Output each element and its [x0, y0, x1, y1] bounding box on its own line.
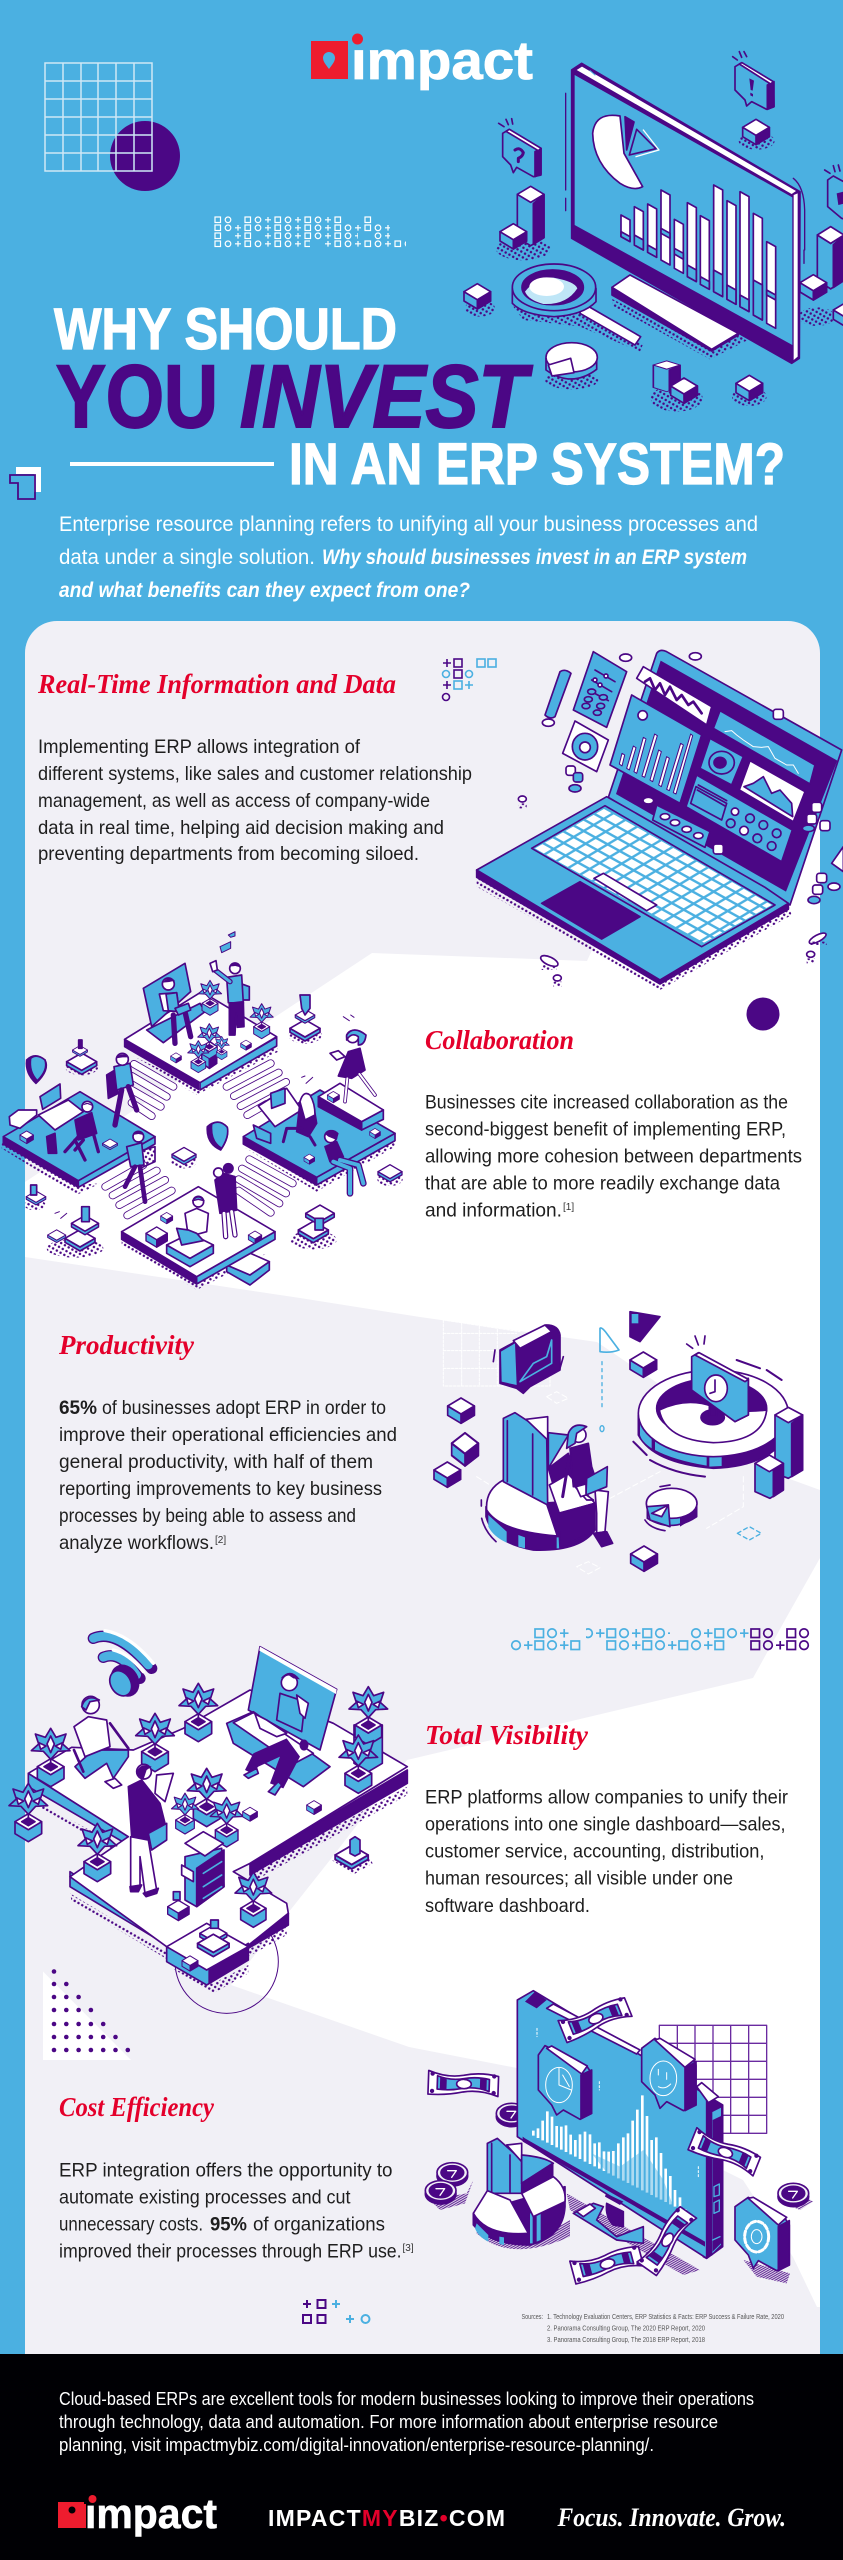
filing cabinet: [182, 1832, 224, 1907]
standing man with tablet: [128, 1764, 173, 1897]
illustration: cost efficiency monitor and money: [425, 1991, 813, 2284]
stairs: [105, 1063, 293, 1215]
footer text: planning, visit impactmybiz.com/digital-innovation/enterprise-resource-planning/.: [59, 2435, 654, 2455]
illustration: analytics monitor: [464, 52, 843, 412]
person: woman in dress: [330, 1030, 375, 1102]
body text: [59, 1397, 397, 1554]
person: VR user: [325, 1130, 363, 1193]
pins: [26, 932, 354, 1218]
body text: [38, 736, 472, 865]
body text: [1]: [563, 1202, 574, 1213]
halftone shadows: [465, 132, 835, 412]
title: why should you invest in an ERP system: INVEST: [240, 346, 533, 446]
3d pie chart: [473, 2138, 565, 2245]
intro paragraph: and what benefits can they expect from one?: [59, 579, 470, 602]
overlay tint on bars: [592, 2150, 673, 2207]
decorative glyph cluster: [442, 659, 496, 700]
body text: general productivity, with half of them: [59, 1451, 373, 1473]
side stands: [26, 995, 402, 1251]
person: walking with backpack: [107, 1053, 137, 1125]
speech bubbles: [538, 2038, 789, 2271]
tagline: Focus. Innovate. Grow.: [557, 2503, 786, 2532]
money bills: [428, 1994, 762, 2284]
body text: of organizations: [253, 2213, 385, 2235]
decorative grid with purple circle: [45, 63, 180, 191]
sources: [522, 2314, 784, 2344]
section: cost efficiency: [59, 2092, 414, 2262]
body text: preventing departments from becoming siloed.: [38, 843, 419, 865]
body text: operations into one single dashboard—sales,: [425, 1814, 786, 1836]
body text: [3]: [402, 2243, 414, 2254]
body text: [59, 2160, 414, 2262]
bottom platform: [122, 1187, 275, 1285]
body text: that are able to more readily exchange data: [425, 1172, 780, 1194]
heading: Productivity: [58, 1330, 195, 1360]
illustration: total visibility platform: [9, 1631, 407, 2013]
left platform: [3, 1092, 155, 1187]
body text: processes by being able to assess and: [59, 1505, 356, 1527]
woman with laptop: [563, 1425, 613, 1547]
halftone shadows: [40, 1787, 407, 1993]
body text: allowing more cohesion between departments: [425, 1145, 802, 1167]
body text: Implementing ERP allows integration of: [38, 736, 361, 758]
footer text: Cloud-based ERPs are excellent tools for modern businesses looking to improve their operations: [59, 2389, 754, 2409]
heading: Real-Time Information and Data: [37, 669, 396, 699]
intro paragraph: data under a single solution.: [59, 546, 315, 569]
people: standing couple: [214, 1164, 237, 1237]
body text: [425, 1092, 802, 1221]
man on bench with laptop: [227, 1647, 337, 1795]
keyboard deck: [477, 797, 788, 984]
body text: management, as well as access of company-wide: [38, 790, 430, 812]
sources: 3. Panorama Consulting Group, The 2018 ERP Report, 2018: [547, 2337, 705, 2344]
illustration: laptop dashboard: [477, 650, 843, 990]
footer band: [0, 2354, 843, 2560]
pie chart on screen: [593, 115, 659, 189]
illustration: productivity charts and woman with laptop: [434, 1312, 803, 1574]
panel: content background: [25, 621, 820, 2354]
body text: automate existing processes and cut: [59, 2186, 351, 2208]
decorative symbol rows: [510, 1628, 810, 1652]
section: collaboration: [425, 998, 802, 1221]
body text: different systems, like sales and customer relationship: [38, 763, 472, 785]
title: why should you invest in an ERP system: YOU: [56, 346, 218, 446]
body text: ERP platforms allow companies to unify their: [425, 1787, 788, 1809]
person: carrying box: [125, 1131, 155, 1202]
body text: data in real time, helping aid decision making and: [38, 817, 444, 839]
body text: [2]: [215, 1535, 226, 1546]
top platform: [125, 992, 277, 1090]
monitor stand: [573, 2203, 643, 2243]
floating shapes: [434, 1312, 761, 1571]
title: why should you invest in an ERP system: [54, 297, 785, 497]
footer logo: impact: [85, 2490, 217, 2537]
person: standing man with phone and backpack: [210, 961, 249, 1035]
small cubes: [20, 1040, 380, 1247]
person: man on bench with monitor: [143, 963, 205, 1043]
line bars on screen: [533, 2095, 685, 2212]
pie with seated woman: [481, 1413, 595, 1550]
body text: of businesses adopt ERP in order to: [102, 1397, 386, 1419]
decorative code pattern: [214, 216, 406, 248]
sources: 2. Panorama Consulting Group, The 2020 ERP Report, 2020: [547, 2326, 705, 2332]
heading: Total Visibility: [425, 1720, 589, 1750]
right platform: [243, 1083, 395, 1185]
person: sitting man: [177, 1196, 208, 1245]
platform: [28, 1690, 407, 1985]
footer text: [59, 2389, 754, 2455]
logo: impact: impact: [351, 31, 533, 91]
icon: bracket corner: [10, 467, 41, 499]
monitor stand: [612, 275, 738, 351]
body text: Businesses cite increased collaboration as the: [425, 1092, 788, 1114]
cubes and columns: [464, 119, 843, 403]
monitor: [517, 1991, 723, 2258]
centre planters: [188, 980, 273, 1073]
footer text: through technology, data and automation. For more information about enterprise resource: [59, 2412, 718, 2432]
purple grid: [659, 2025, 767, 2133]
sources: 1. Technology Evaluation Centers, ERP Statistics & Facts: ERP Success & Failure Rate, 2020: [547, 2314, 784, 2321]
website url: IMPACTMYBIZ•COM: [268, 2505, 505, 2531]
body text: and information.: [425, 1199, 562, 1221]
magnifying glass: [512, 264, 641, 345]
intro paragraph: [59, 513, 758, 602]
small pie icon: [546, 343, 597, 379]
laptop lid: [608, 650, 842, 905]
body text: analyze workflows.: [59, 1532, 214, 1554]
seated man: [74, 1696, 128, 1788]
section: productivity: [58, 1330, 397, 1554]
small items: [168, 1801, 368, 1971]
intro paragraph: Enterprise resource planning refers to unifying all your business processes and: [59, 513, 758, 536]
body text: software dashboard.: [425, 1895, 590, 1917]
desktop monitor with clock: [687, 1336, 748, 1425]
columns: [755, 1407, 803, 1498]
person: woman at workstation: [253, 1088, 317, 1145]
thin circle: [175, 1910, 278, 2013]
person: at desk: [9, 1084, 117, 1160]
body text: improve their operational efficiencies and: [59, 1424, 397, 1446]
screen widgets: [610, 667, 815, 862]
decorative glyphs bottom: [303, 2300, 370, 2323]
wifi icon: [93, 1631, 153, 1701]
body text: 65%: [59, 1397, 97, 1419]
purple dot: [746, 998, 780, 1030]
intro paragraph: Why should businesses invest in an ERP system: [322, 546, 747, 569]
body text: reporting improvements to key business: [59, 1478, 382, 1500]
speech bubble: settings: [825, 165, 843, 220]
plants: [9, 1683, 388, 1927]
section: real-time information and data: [37, 669, 472, 865]
coins: [425, 2103, 809, 2207]
hatched shadows: [430, 2180, 813, 2283]
laptop shadow: [477, 875, 792, 990]
title: why should you invest in an ERP system: WHY SHOULD: [54, 297, 397, 362]
small pie chart: [645, 1485, 697, 1531]
dotted triangle: [43, 1969, 131, 2060]
body text: improved their processes through ERP use.: [59, 2240, 402, 2262]
body text: ERP integration offers the opportunity to: [59, 2160, 393, 2182]
heading: Cost Efficiency: [59, 2092, 215, 2122]
white dashed grid: [443, 1320, 550, 1527]
big ring chart: [633, 1360, 788, 1477]
body text: second-biggest benefit of implementing ERP,: [425, 1118, 786, 1140]
heading: Collaboration: [425, 1025, 574, 1055]
halftone shadows: [2, 1026, 403, 1290]
body text: customer service, accounting, distribution,: [425, 1841, 764, 1863]
speech bubble: exclamation: [733, 52, 774, 109]
illustration: collaboration isometric platforms: [2, 932, 403, 1290]
sources: Sources:: [522, 2314, 543, 2321]
speech bubble: question: [499, 119, 541, 177]
body text: 95%: [210, 2213, 247, 2235]
speech bubble with line chart: [493, 1325, 563, 1393]
monitor body: [566, 63, 805, 363]
white dashed connectors: [477, 1392, 743, 1574]
floating controls: [518, 652, 843, 987]
bar chart on screen: [621, 185, 776, 328]
body text: [425, 1787, 788, 1917]
body text: human resources; all visible under one: [425, 1868, 733, 1890]
section: total visibility: [425, 1720, 788, 1917]
body text: unnecessary costs.: [59, 2213, 203, 2235]
